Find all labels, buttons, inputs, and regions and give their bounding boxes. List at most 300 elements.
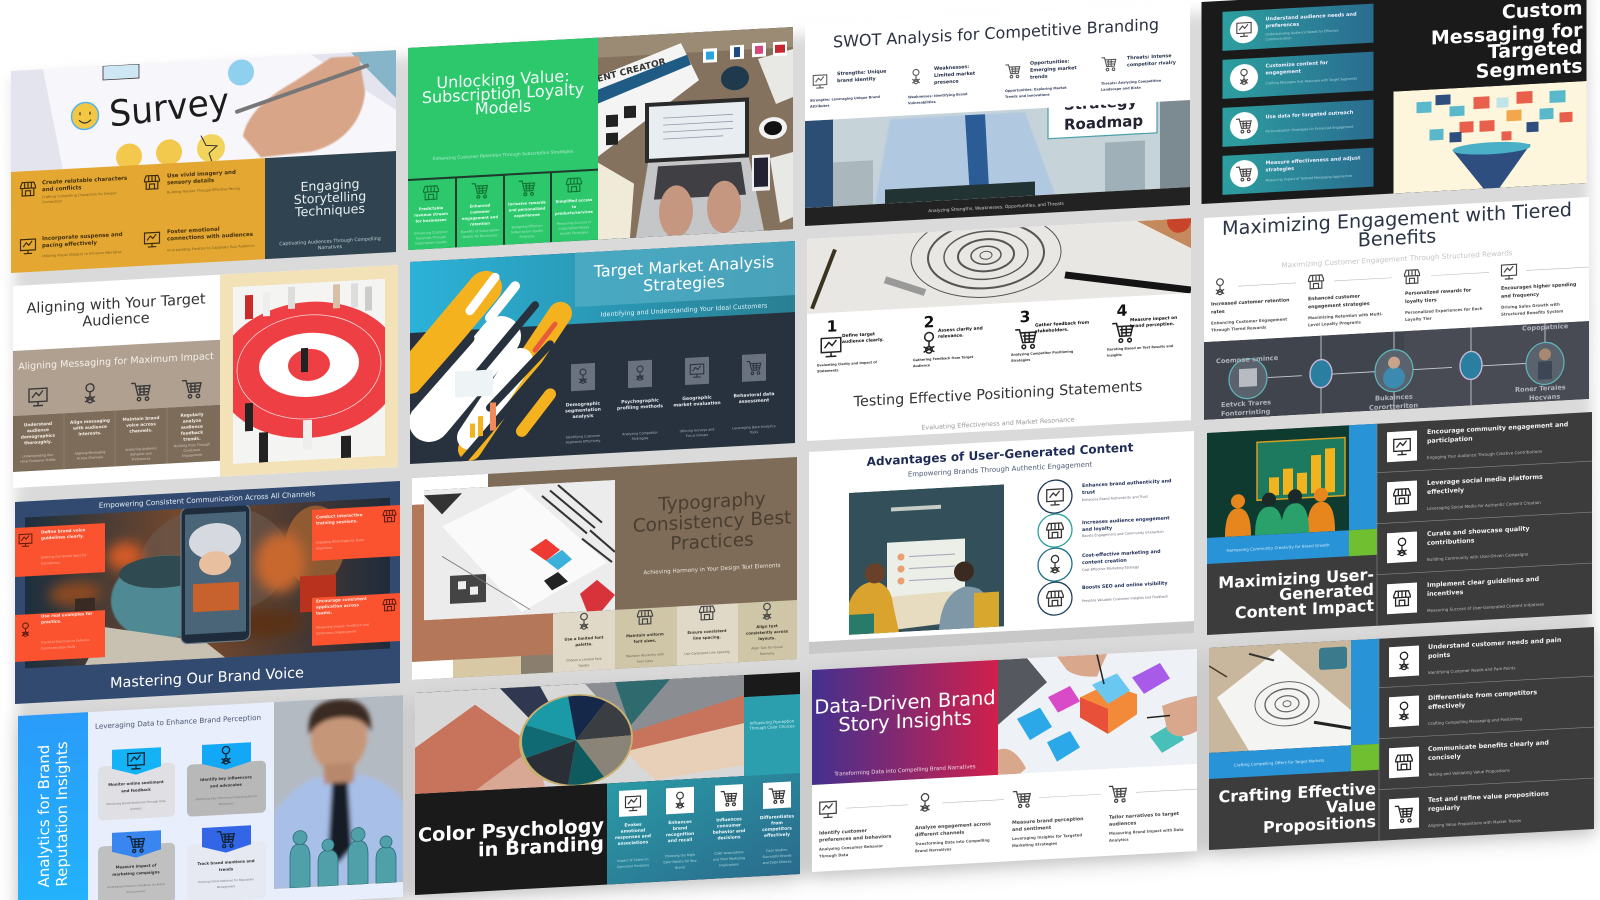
subtitle: Evaluating Effectiveness and Market Resonance <box>921 415 1075 432</box>
title <box>1219 779 1376 839</box>
benefit columns: customer <box>470 209 490 215</box>
benefit text: and frequency <box>1501 292 1539 300</box>
benefit columns: retention <box>470 221 490 227</box>
cards: Management <box>217 884 236 889</box>
effects panel: and Their Marketing <box>713 856 745 862</box>
cards: trends <box>219 866 234 872</box>
benefit text: Increased customer retention <box>1211 297 1289 308</box>
benefit text <box>1211 282 1576 333</box>
orange callouts: Communication Skills <box>41 645 76 651</box>
title: Crafting Effective <box>1219 779 1376 806</box>
orange callouts: Consistency <box>41 561 60 566</box>
green title panel: Models <box>475 96 531 118</box>
numbers: 2 <box>924 313 934 332</box>
tips columns: font sizes. <box>634 638 657 644</box>
panel: title: Engaging <box>300 176 360 194</box>
research text: Strategies <box>632 436 649 441</box>
effects panel: Influences <box>716 816 742 824</box>
slide: Analytics for Brand Reputation <box>18 695 403 900</box>
benefit text: content creation <box>1082 558 1127 566</box>
brown columns: Understand <box>24 421 52 428</box>
effects panel: responses and <box>615 833 651 841</box>
research icons <box>571 354 766 391</box>
panel: title: Narratives <box>318 244 343 251</box>
title: Generated <box>1279 580 1374 604</box>
title: Consistency Best <box>633 507 791 537</box>
panel: tips: Incorporating Emotion to Captivate Your Audience <box>167 244 255 252</box>
benefit text <box>1082 478 1172 603</box>
orange callouts: application across <box>316 602 359 610</box>
slide: Testing Positioning Statements <box>807 202 1191 441</box>
benefit text: rates <box>1211 309 1225 316</box>
brown columns: Behavior and <box>130 451 152 457</box>
rows: contributions <box>1427 537 1475 547</box>
tips columns: Use a limited font <box>564 635 604 642</box>
side banner: Reputation Insights <box>53 741 71 887</box>
brown columns: Engagement <box>182 453 203 458</box>
benefit columns: and personalized <box>509 206 546 213</box>
step text: stakeholders. <box>1035 327 1069 335</box>
slide: Aligning with Your Target Audience <box>13 265 401 488</box>
numbers: 1 <box>827 317 837 336</box>
benefit text: loyalty tiers <box>1405 297 1437 305</box>
effects panel: Consumer Emotions <box>617 863 649 869</box>
network diagram photo: Corortteriton <box>1369 401 1418 412</box>
benefit text: and loyalty <box>1082 525 1113 533</box>
benefit text: Enhanced customer <box>1308 293 1361 302</box>
benefit text: Through Tiered Rewards <box>1211 325 1267 333</box>
brown columns: demographics <box>21 433 56 441</box>
panel: tips: and conflicts <box>42 185 82 193</box>
research text: segmentation <box>565 407 601 415</box>
title: Typography <box>657 489 766 516</box>
network diagram photo: Eetvck Trares <box>1221 398 1271 409</box>
gradient title panel: Story Insights <box>838 706 972 737</box>
slide: Unlocking Value <box>408 27 793 252</box>
benefit columns: products/services <box>555 209 594 216</box>
effects panel: Color Associations <box>714 850 744 856</box>
cards: Tracking Online Mentions for Reputation <box>197 877 254 884</box>
effects panel: and recall <box>668 837 693 844</box>
slide: Tiered Benefits <box>1204 197 1589 421</box>
soft shadow behind slides <box>18 633 1594 900</box>
research text: Utilizing Surveys and <box>680 427 714 433</box>
tips columns <box>553 600 797 672</box>
slide: Maximizing UGC Impact <box>1207 412 1592 635</box>
effects panel: Differentiates <box>760 813 794 821</box>
cream image frame <box>220 265 398 477</box>
rows <box>1377 412 1592 626</box>
target photo <box>233 278 385 464</box>
cards: Measure impact of <box>116 862 157 870</box>
timeline text: Analyzing Consumer Behavior <box>819 843 883 852</box>
gradient title panel <box>812 660 998 785</box>
step icons <box>821 321 1133 360</box>
rows: effectively <box>1427 487 1464 496</box>
gradient title panel: Data-Driven Brand <box>814 686 996 719</box>
orange callouts: Continuous Improvement <box>316 629 357 636</box>
blue and green blocks: Harnessing Community Creativity for Brand Growth <box>1226 542 1330 553</box>
title: Value <box>1326 795 1376 817</box>
rows: Crafting Compelling Messaging and Positioning <box>1428 716 1523 726</box>
benefit columns: Enhanced <box>470 202 491 209</box>
SWOT items: presence <box>934 79 959 86</box>
SWOT items: Attributes <box>810 104 829 109</box>
rows: Building Community with User-Driven Campaigns <box>1427 552 1528 562</box>
network diagram photo: Coemnse smince <box>1216 354 1279 365</box>
brown columns: with audience <box>73 424 107 432</box>
SWOT items: Opportunities: Exploring Market <box>1005 86 1067 93</box>
step text: Iterating Based on Test Results and <box>1107 344 1174 352</box>
numbers: 3 <box>1020 308 1030 326</box>
cards: marketing campaigns <box>112 869 160 877</box>
benefit text: Enhancing Customer Engagement <box>1211 316 1287 326</box>
message panels: Crafting Messages that Resonate with Target Segments <box>1266 77 1357 86</box>
effects panel: Brand <box>675 865 685 870</box>
benefit columns: Simplified access <box>556 197 593 204</box>
SWOT items: Landscape and Risks <box>1101 86 1141 92</box>
brown columns: Ideal Customer Profile <box>20 458 56 464</box>
rows: participation <box>1427 436 1473 445</box>
panel: tips: Utilizing Visual Imagery to Enhance Narrative <box>42 250 121 258</box>
message panels: Measuring Impact of Tailored Messaging Approaches <box>1266 174 1352 183</box>
tips columns: Align text <box>756 623 778 629</box>
numbers: 4 <box>1117 302 1128 320</box>
benefit text: Enhances brand authenticity and <box>1082 478 1172 489</box>
panel: tips: pacing effectively <box>42 240 97 249</box>
slide: Engaging Storytelling Techniques <box>11 50 396 273</box>
SWOT items: Threats: Analyzing Competitive <box>1101 79 1162 86</box>
brown columns: Preferences <box>132 456 151 462</box>
right strip <box>744 694 800 777</box>
panel: tips: connections with audiences <box>167 232 254 242</box>
footer bar <box>805 187 1190 226</box>
timeline text: Analytics <box>1109 837 1129 843</box>
stationery photo <box>424 480 615 620</box>
paper sketch photo <box>1209 640 1351 753</box>
step text <box>817 315 1177 373</box>
effects panel: effectively <box>764 832 790 839</box>
title: SWOT Analysis for Competitive Branding <box>833 15 1159 51</box>
effects panel: associations <box>618 839 649 847</box>
panel: tips: Connection <box>42 199 62 204</box>
top band: Strategies <box>643 272 725 295</box>
effects panel: Successful Brands <box>762 853 792 859</box>
rows: Implement clear guidelines and <box>1427 576 1539 589</box>
research text: Identifying Customer <box>566 434 601 440</box>
illustration: envelopes into funnel <box>1394 81 1586 194</box>
benefit text: Cost-Effective Marketing Strategy <box>1082 565 1139 572</box>
rows: Identifying Customer Needs and Pain Points <box>1428 665 1515 675</box>
benefit text: Encourages higher spending <box>1501 282 1576 292</box>
timeline text: Tailor narratives to target <box>1109 811 1180 821</box>
brown columns: trends. <box>183 436 201 443</box>
step text: Insights <box>1107 353 1122 358</box>
tips columns: Align Text for Visual <box>751 645 783 651</box>
timeline text: Identify customer <box>819 828 868 837</box>
SWOT items: Strengths: Unique <box>837 69 887 77</box>
orange callouts: Conduct interactive <box>316 512 363 520</box>
network diagram photo: Hecvans <box>1529 393 1560 402</box>
white header <box>805 3 1190 121</box>
title: Propositions <box>1263 812 1376 837</box>
panel: title: Techniques <box>294 201 365 220</box>
tan band <box>13 340 220 416</box>
message panels: Personalization Strategies for Enhanced Engagement <box>1266 125 1354 134</box>
side banner <box>18 712 88 900</box>
sketch photo <box>807 218 1191 314</box>
orange callouts: Measuring Impact: Feedback and <box>316 623 369 630</box>
brown columns: channels. <box>129 427 153 435</box>
research text: assessment <box>739 397 770 405</box>
benefit rings <box>1038 479 1072 616</box>
designers photo <box>998 649 1197 775</box>
title: Color Psychology <box>418 814 604 847</box>
research text: Focus Groups <box>686 433 708 438</box>
network diagram photo <box>1204 321 1589 420</box>
step text: brand perception. <box>1130 321 1175 329</box>
panel: tips: sensory details <box>167 178 215 186</box>
slide: Data-Driven Brand Story <box>812 649 1197 872</box>
blue and green blocks <box>1209 639 1379 779</box>
cards: Monitor online sentiment <box>108 779 164 787</box>
brown columns: voice across <box>126 421 156 429</box>
effects panel <box>607 773 800 885</box>
rows: Curate and showcase quality <box>1427 525 1530 538</box>
benefit columns: revenue stream <box>414 211 448 218</box>
benefit text: trust <box>1082 489 1096 496</box>
orange callouts <box>15 505 400 662</box>
slide: Advantages of User-Generated Content <box>809 431 1194 654</box>
orange callouts: Encourage consistent <box>316 596 367 604</box>
research text: Leveraging Data Analytics <box>732 424 776 430</box>
brown columns <box>13 405 220 472</box>
benefit columns: Programs <box>519 234 535 239</box>
rows: concisely <box>1428 753 1461 762</box>
benefit text: Structured Benefits System <box>1501 308 1563 317</box>
slide: Custom Messaging <box>1202 0 1586 204</box>
effects panel: from <box>771 820 783 827</box>
tips columns: line spacing. <box>693 634 721 641</box>
benefit text: Boosts Engagement and Community Interaction <box>1082 530 1164 538</box>
title: Mastering Our Brand Voice <box>110 665 304 692</box>
desk photo: CONTENT CREATOR <box>569 57 667 92</box>
brown columns: audience <box>27 427 49 434</box>
fantasy phone photo <box>25 498 390 668</box>
benefit columns: Retention Through <box>416 235 446 241</box>
research text: Behavioral data <box>734 391 774 399</box>
benefit text: Loyalty Tier <box>1405 316 1432 322</box>
benefit columns: experiences <box>514 212 541 218</box>
benefit text: Cost-effective marketing and <box>1082 549 1161 559</box>
slide: Target Market Analysis <box>410 241 795 467</box>
effects panel: emotional <box>621 827 646 835</box>
benefit columns: engagement and <box>462 214 498 221</box>
title: Aligning with Your Target <box>26 291 206 317</box>
network diagram photo: Bukainces <box>1375 393 1413 403</box>
slide: Mastering Our Brand Voice <box>15 481 400 704</box>
orange callouts: guidelines clearly. <box>41 533 84 541</box>
SWOT items: Weaknesses: Identifying Brand <box>908 92 968 99</box>
rows: Test and refine value propositions <box>1428 790 1549 804</box>
network diagram photo: Fontorrinting <box>1221 407 1271 418</box>
effects panel: decisions <box>717 834 741 842</box>
rows <box>1379 627 1594 841</box>
orange callouts: Practical Exercises to Enhance <box>41 638 90 645</box>
SWOT items: competitor rivalry <box>1127 60 1177 68</box>
timeline text: Transforming Data into Compelling <box>915 837 990 846</box>
brown columns: Aligning Messaging <box>75 450 105 456</box>
step text: Define target <box>842 331 875 339</box>
SWOT items: Vulnerabilities <box>908 100 936 105</box>
slide: Crafting Effective Value Propositions <box>1209 627 1594 850</box>
research text: market evaluation <box>673 400 721 409</box>
SWOT items: Limited market <box>934 71 976 79</box>
brown columns: Across Channels <box>77 455 103 461</box>
slide: SWOT Analysis <box>805 3 1190 226</box>
title: Practices <box>670 529 754 555</box>
rows: Leveraging Social Media for Authentic Content Creation <box>1427 500 1541 511</box>
Survey word: Survey <box>108 81 230 136</box>
orange callouts: Define brand voice <box>41 527 86 535</box>
benefit columns: Models for Businesses <box>462 233 498 239</box>
SWOT items: Threats: Intense <box>1127 53 1172 61</box>
step text: Audience <box>913 363 931 368</box>
message panels: Understand audience needs and <box>1266 12 1357 23</box>
tips columns: Harmony <box>760 651 774 656</box>
footer bar: Analyzing Strengths, Weaknesses, Opportunities, and Threats <box>928 201 1065 214</box>
title: Targeted <box>1488 36 1583 63</box>
benefit columns: Subscription-Based <box>559 225 589 231</box>
brown columns: Align messaging <box>70 418 110 426</box>
blue and green blocks <box>1207 424 1377 564</box>
research text <box>565 391 776 445</box>
brown columns: Building Trust Through <box>174 442 210 448</box>
audience illustration <box>1207 425 1349 538</box>
tips columns: consistently across <box>746 628 789 636</box>
timeline text: audiences <box>1109 820 1136 828</box>
cards: Identifying Key Influencers Impacting Brand <box>195 794 257 801</box>
benefit text: Enhances Brand Authenticity and Trust <box>1082 494 1149 502</box>
brown columns: feedback <box>181 430 203 437</box>
benefit text: Increases audience engagement <box>1082 515 1170 526</box>
research text: Tools <box>749 430 758 435</box>
tips columns: Maintain uniform <box>626 631 664 638</box>
orange callouts: Use real examples for <box>41 611 93 619</box>
rows: Differentiate from competitors <box>1428 689 1537 702</box>
benefit text: Level Loyalty Programs <box>1308 319 1362 327</box>
numbers <box>827 302 1128 337</box>
benefit columns: Enhancing Customer <box>414 230 448 236</box>
rows: incentives <box>1427 589 1464 598</box>
timeline text: and sentiment <box>1012 825 1052 833</box>
brown columns: interests. <box>78 430 102 437</box>
right strip: Through Color Choices <box>748 723 795 731</box>
timeline text: preferences and behaviors <box>819 834 892 844</box>
step text: Strategies <box>1011 358 1030 363</box>
title <box>418 814 604 865</box>
subtitle: Empowering Consistent Communication Across All Channels <box>99 489 315 510</box>
blue and green blocks: Crafting Compelling Offers for Target Markets <box>1234 758 1324 768</box>
brown columns: Maintain brand <box>123 415 159 423</box>
title: in Branding <box>478 832 604 862</box>
benefit icons <box>1216 259 1589 295</box>
benefit columns: Designing Effective <box>512 224 542 229</box>
cards: Track brand mentions and <box>197 858 255 866</box>
effects panel: competitors <box>762 825 792 833</box>
brown columns: audience <box>181 424 203 431</box>
gradient title panel: Transforming Data into Compelling Brand Narratives <box>833 764 976 778</box>
tips columns: Palette <box>578 663 590 668</box>
timeline text: different channels <box>915 830 964 838</box>
subtitle: Achieving Harmony in Your Design Text Elements <box>643 563 781 576</box>
green title panel: Enhancing Customer Retention Through Subscription Strategies <box>433 148 574 162</box>
colour wheel photo <box>415 675 744 794</box>
timeline text: Measure brand perception <box>1012 816 1084 826</box>
effects panel: Enhances <box>668 819 692 826</box>
effects panel: Evokes <box>624 822 642 829</box>
benefit columns: Inclusive rewards <box>508 199 547 207</box>
brown columns: analyze <box>183 418 201 425</box>
benefit text: Maximizing Retention with Multi- <box>1308 311 1383 320</box>
message panels <box>1222 4 1374 195</box>
research text: Analyzing Competitor <box>622 430 658 436</box>
SWOT items: trends <box>1030 74 1048 81</box>
title: Audience <box>82 311 150 330</box>
rows: points <box>1428 652 1450 660</box>
survey photo <box>11 50 396 172</box>
tips columns: Use Consistent Line Spacing <box>684 650 730 656</box>
panel: tips <box>11 158 265 273</box>
effects panel: Choosing the Right <box>665 853 696 858</box>
message panels: preferences <box>1266 22 1299 30</box>
brown columns: Understanding Your <box>22 453 54 458</box>
step text: audience clearly. <box>842 337 884 345</box>
orange callouts: Defining Our Brand Voice for <box>41 553 87 560</box>
panel: tips: Create relatable characters <box>42 176 128 186</box>
right strip: Influencing Perception <box>750 718 795 726</box>
tan band: Aligning Messaging for Maximum Impact <box>18 351 214 373</box>
cards <box>98 741 266 900</box>
benefit columns: Subscription Loyalty <box>415 240 447 246</box>
step text: Measure impact on <box>1130 315 1177 323</box>
benefit columns: to <box>572 204 577 209</box>
effects panel: behavior and <box>713 828 745 836</box>
SWOT items: brand identity <box>837 76 877 84</box>
subtitle: Maximizing Customer Engagement Through Structured Rewards <box>1281 248 1513 270</box>
network diagram photo: Roner Teraies <box>1515 383 1566 394</box>
panel: tips: Incorporate suspense and <box>42 232 123 242</box>
cards: Leveraging Customer Feedback for Brand <box>107 882 165 889</box>
top band: Target Market Analysis <box>593 252 774 281</box>
orange callouts: teams. <box>316 610 333 616</box>
green title panel <box>408 38 598 179</box>
benefit text: Boosts SEO and online visibility <box>1082 580 1168 591</box>
tips columns: layouts. <box>758 635 776 641</box>
message panels: Customize content for <box>1266 60 1328 70</box>
benefit text: Provides Valuable Customer Insights and Feedback <box>1082 594 1168 603</box>
cards: Improvement <box>127 889 146 894</box>
title <box>1222 198 1572 259</box>
rows: Aligning Value Propositions with Market Trends <box>1428 818 1521 828</box>
title: Messaging for <box>1431 19 1583 49</box>
timeline text <box>819 811 1184 859</box>
tips columns: Maintain Hierarchy with <box>626 652 664 658</box>
subtitle: Leveraging Data to Enhance Brand Perception <box>95 713 261 731</box>
brown columns: thoroughly. <box>24 439 52 446</box>
title <box>1218 565 1374 623</box>
timeline text: Through Data <box>819 852 849 859</box>
